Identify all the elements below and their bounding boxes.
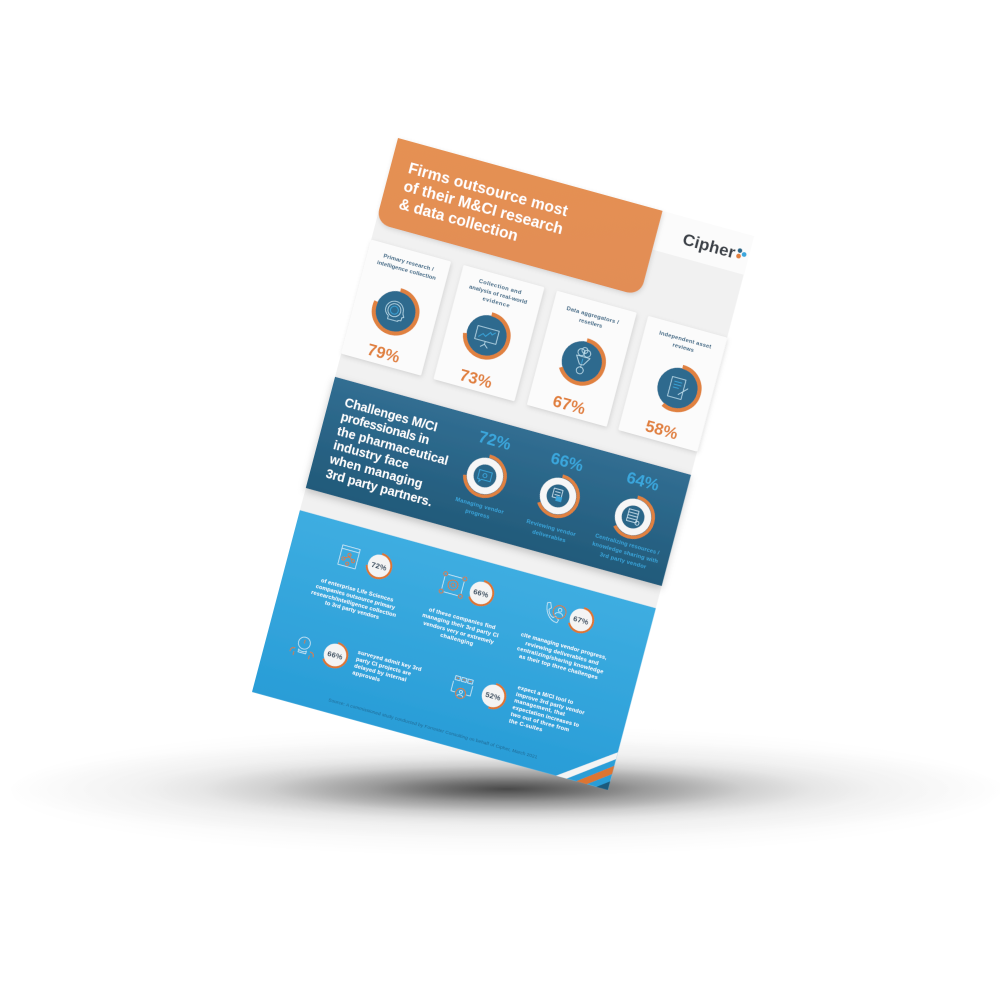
- finding text: to 3rd party vendors: [324, 600, 380, 621]
- donut 67 percent: 67%: [572, 614, 590, 627]
- stat: reviewing vendor deliverables: Reviewing vendor: [526, 519, 577, 538]
- header title: Firms outsource most: [406, 160, 569, 220]
- panel: key findings: [252, 510, 656, 790]
- band heading: professionals in: [339, 410, 431, 448]
- stat: reviewing vendor deliverables: [524, 447, 596, 547]
- card: real-world evidence: [434, 265, 544, 401]
- header banner: [376, 138, 663, 296]
- donut 79 percent with head icon: [369, 284, 422, 339]
- panel: challenges band: [306, 377, 691, 586]
- finding text: two out of three from: [510, 712, 570, 734]
- percentage: 67%: [551, 392, 587, 419]
- finding text: approvals: [352, 670, 381, 683]
- card label: resellers: [578, 318, 603, 330]
- finding text: [418, 606, 501, 654]
- finding 4: 66 percent: [288, 631, 423, 694]
- card label: intelligence collection: [376, 260, 437, 282]
- stat: managing vendor progress: 72%: [476, 428, 513, 454]
- logo panel: [648, 210, 754, 275]
- finding text: the C-suites: [508, 718, 543, 733]
- icon: cycle of nodes: [439, 571, 467, 599]
- donut 66 percent: 66%: [326, 649, 344, 662]
- stat: managing vendor progress: progress: [464, 508, 490, 521]
- infographic sheet: [252, 138, 754, 790]
- finding text: cite managing vendor progress,: [520, 632, 608, 662]
- card label: [466, 277, 530, 314]
- header title: [397, 160, 569, 256]
- card label: Collection and: [478, 279, 522, 296]
- card label: evidence: [482, 296, 511, 310]
- finding 1: 72 percent: [309, 539, 411, 625]
- finding text: [352, 650, 423, 694]
- stat: centralizing resources: 3rd party vendor: [599, 552, 647, 571]
- donut 66 percent: 66%: [472, 587, 490, 600]
- source note: Source: A commissioned study conducted by Forrester Consulting on behalf of Cipher, March 2021: [328, 697, 538, 761]
- finding text: research/intelligence collection: [310, 590, 397, 619]
- stat: centralizing resources: [589, 464, 679, 573]
- card label: [656, 330, 712, 358]
- icon: network window: [338, 545, 360, 569]
- card label: analysis of real-world: [468, 284, 528, 306]
- finding text: [508, 685, 588, 743]
- logo dots: [736, 248, 748, 260]
- finding text: expect a M/CI tool to: [517, 685, 574, 706]
- icon: clock over people: [289, 634, 317, 660]
- finding text: vendors very or extremely: [423, 621, 495, 646]
- donut 58 percent with document icon: [651, 361, 704, 415]
- icon: phone and person: [543, 602, 568, 624]
- stat: reviewing vendor deliverables: deliverables: [531, 529, 566, 544]
- band heading: industry face: [332, 438, 410, 472]
- stat: centralizing resources: 64%: [625, 469, 661, 495]
- card label: Independent asset: [658, 330, 712, 351]
- band heading: Challenges M/CI: [343, 396, 439, 435]
- stat: centralizing resources: Centralizing resources /: [594, 533, 660, 557]
- finding 3: 67 percent: [514, 594, 618, 682]
- card: data aggregators: [527, 291, 637, 427]
- finding 2: 66 percent: [418, 568, 511, 654]
- band heading: 3rd party partners.: [324, 467, 434, 509]
- band heading: when managing: [327, 452, 424, 491]
- sheet background: [252, 138, 754, 790]
- ground shadow: [0, 725, 1000, 857]
- finding text: managing their 3rd party CI: [421, 613, 499, 640]
- card: independent asset reviews: [618, 316, 727, 452]
- finding 5: 52 percent: [447, 668, 588, 743]
- band heading: [323, 395, 457, 511]
- donut 67 percent with funnel icon: [555, 335, 609, 389]
- finding text: party CI projects are: [355, 657, 412, 677]
- stat: managing vendor progress: [452, 426, 524, 524]
- finding text: of enterprise Life Sciences: [320, 578, 394, 604]
- corner stripes: [556, 738, 618, 790]
- stat: managing vendor progress: Managing vendor: [455, 497, 505, 516]
- percentage: 79%: [365, 341, 402, 367]
- finding text: management, that: [513, 698, 566, 718]
- card label: [564, 306, 620, 334]
- finding text: [309, 577, 401, 625]
- donut 52 percent: 52%: [484, 690, 502, 703]
- finding text: delayed by internal: [353, 663, 407, 684]
- donut 72 percent: 72%: [370, 560, 388, 573]
- percentage: 58%: [643, 417, 680, 444]
- header title: & data collection: [397, 196, 520, 245]
- logo wordmark: Cipher: [681, 230, 738, 262]
- donut 52 percent: [478, 681, 508, 711]
- finding text: reviewing deliverables and: [525, 641, 600, 667]
- finding text: surveyed admit key 3rd: [357, 650, 423, 673]
- card: primary research: [341, 240, 451, 376]
- finding text: [514, 632, 608, 682]
- card label: reviews: [672, 342, 694, 354]
- percentage: 73%: [458, 366, 494, 392]
- card label: Primary research /: [383, 253, 434, 273]
- band heading: the pharmaceutical: [336, 424, 450, 468]
- finding text: centralizing/sharing knowledge: [516, 646, 604, 675]
- finding text: companies outsource primary: [315, 584, 396, 612]
- icon: team of screens: [450, 675, 474, 701]
- header title: of their M&CI research: [402, 178, 565, 238]
- finding text: challenging: [439, 633, 474, 648]
- finding text: expectation increases to: [512, 705, 580, 729]
- stat: centralizing resources: knowledge sharing with: [592, 541, 659, 565]
- finding text: as their top three challenges: [518, 654, 598, 681]
- stat: reviewing vendor deliverables: 66%: [549, 449, 585, 476]
- finding text: of these companies find: [428, 607, 497, 631]
- finding text: improve 3rd party vendor: [515, 692, 586, 717]
- card label: Data aggregators /: [566, 306, 620, 326]
- donut 73 percent with chart icon: [460, 309, 514, 363]
